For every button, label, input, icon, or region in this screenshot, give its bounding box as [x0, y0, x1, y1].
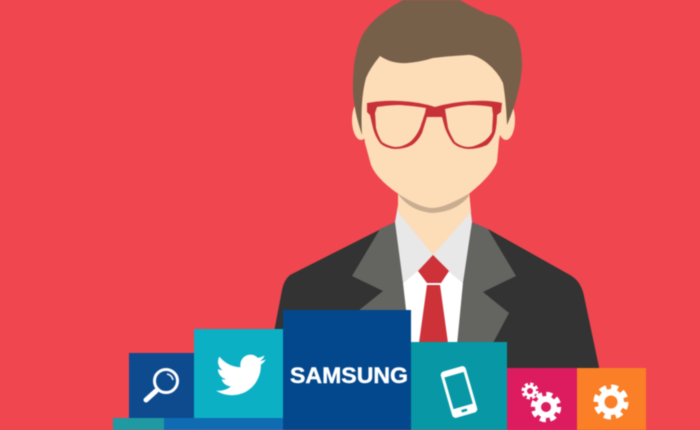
shirt [403, 255, 463, 345]
icon: small gear [524, 384, 536, 398]
tile: samsung [283, 310, 411, 430]
left lapel [340, 222, 410, 345]
tile: twitter [194, 329, 283, 418]
icon: magnifying glass [146, 370, 178, 400]
right lapel [457, 222, 516, 343]
hair [353, 0, 522, 135]
right ear [497, 100, 515, 140]
icon: large gear [533, 394, 559, 420]
tile: settings orange [577, 368, 646, 430]
businessman figure [274, 0, 600, 430]
jacket [274, 229, 600, 430]
icon: smartphone [440, 365, 478, 419]
tile: bottom blue [164, 418, 284, 430]
face [359, 45, 506, 208]
icon: twitter bird [216, 355, 266, 395]
tie knot [418, 255, 449, 283]
left ear [352, 100, 370, 140]
neck [398, 190, 471, 255]
tile: settings pink [507, 368, 577, 430]
tie [418, 255, 449, 343]
tie blade [419, 285, 448, 343]
neck shadow [398, 192, 469, 213]
samsung wordmark: SAMSUNG [290, 363, 408, 388]
tile: search [129, 353, 194, 418]
collar [395, 205, 472, 283]
tile: bottom teal [113, 418, 164, 430]
tile: phone [411, 342, 507, 430]
glasses [367, 101, 502, 149]
icon: gear [596, 387, 626, 417]
